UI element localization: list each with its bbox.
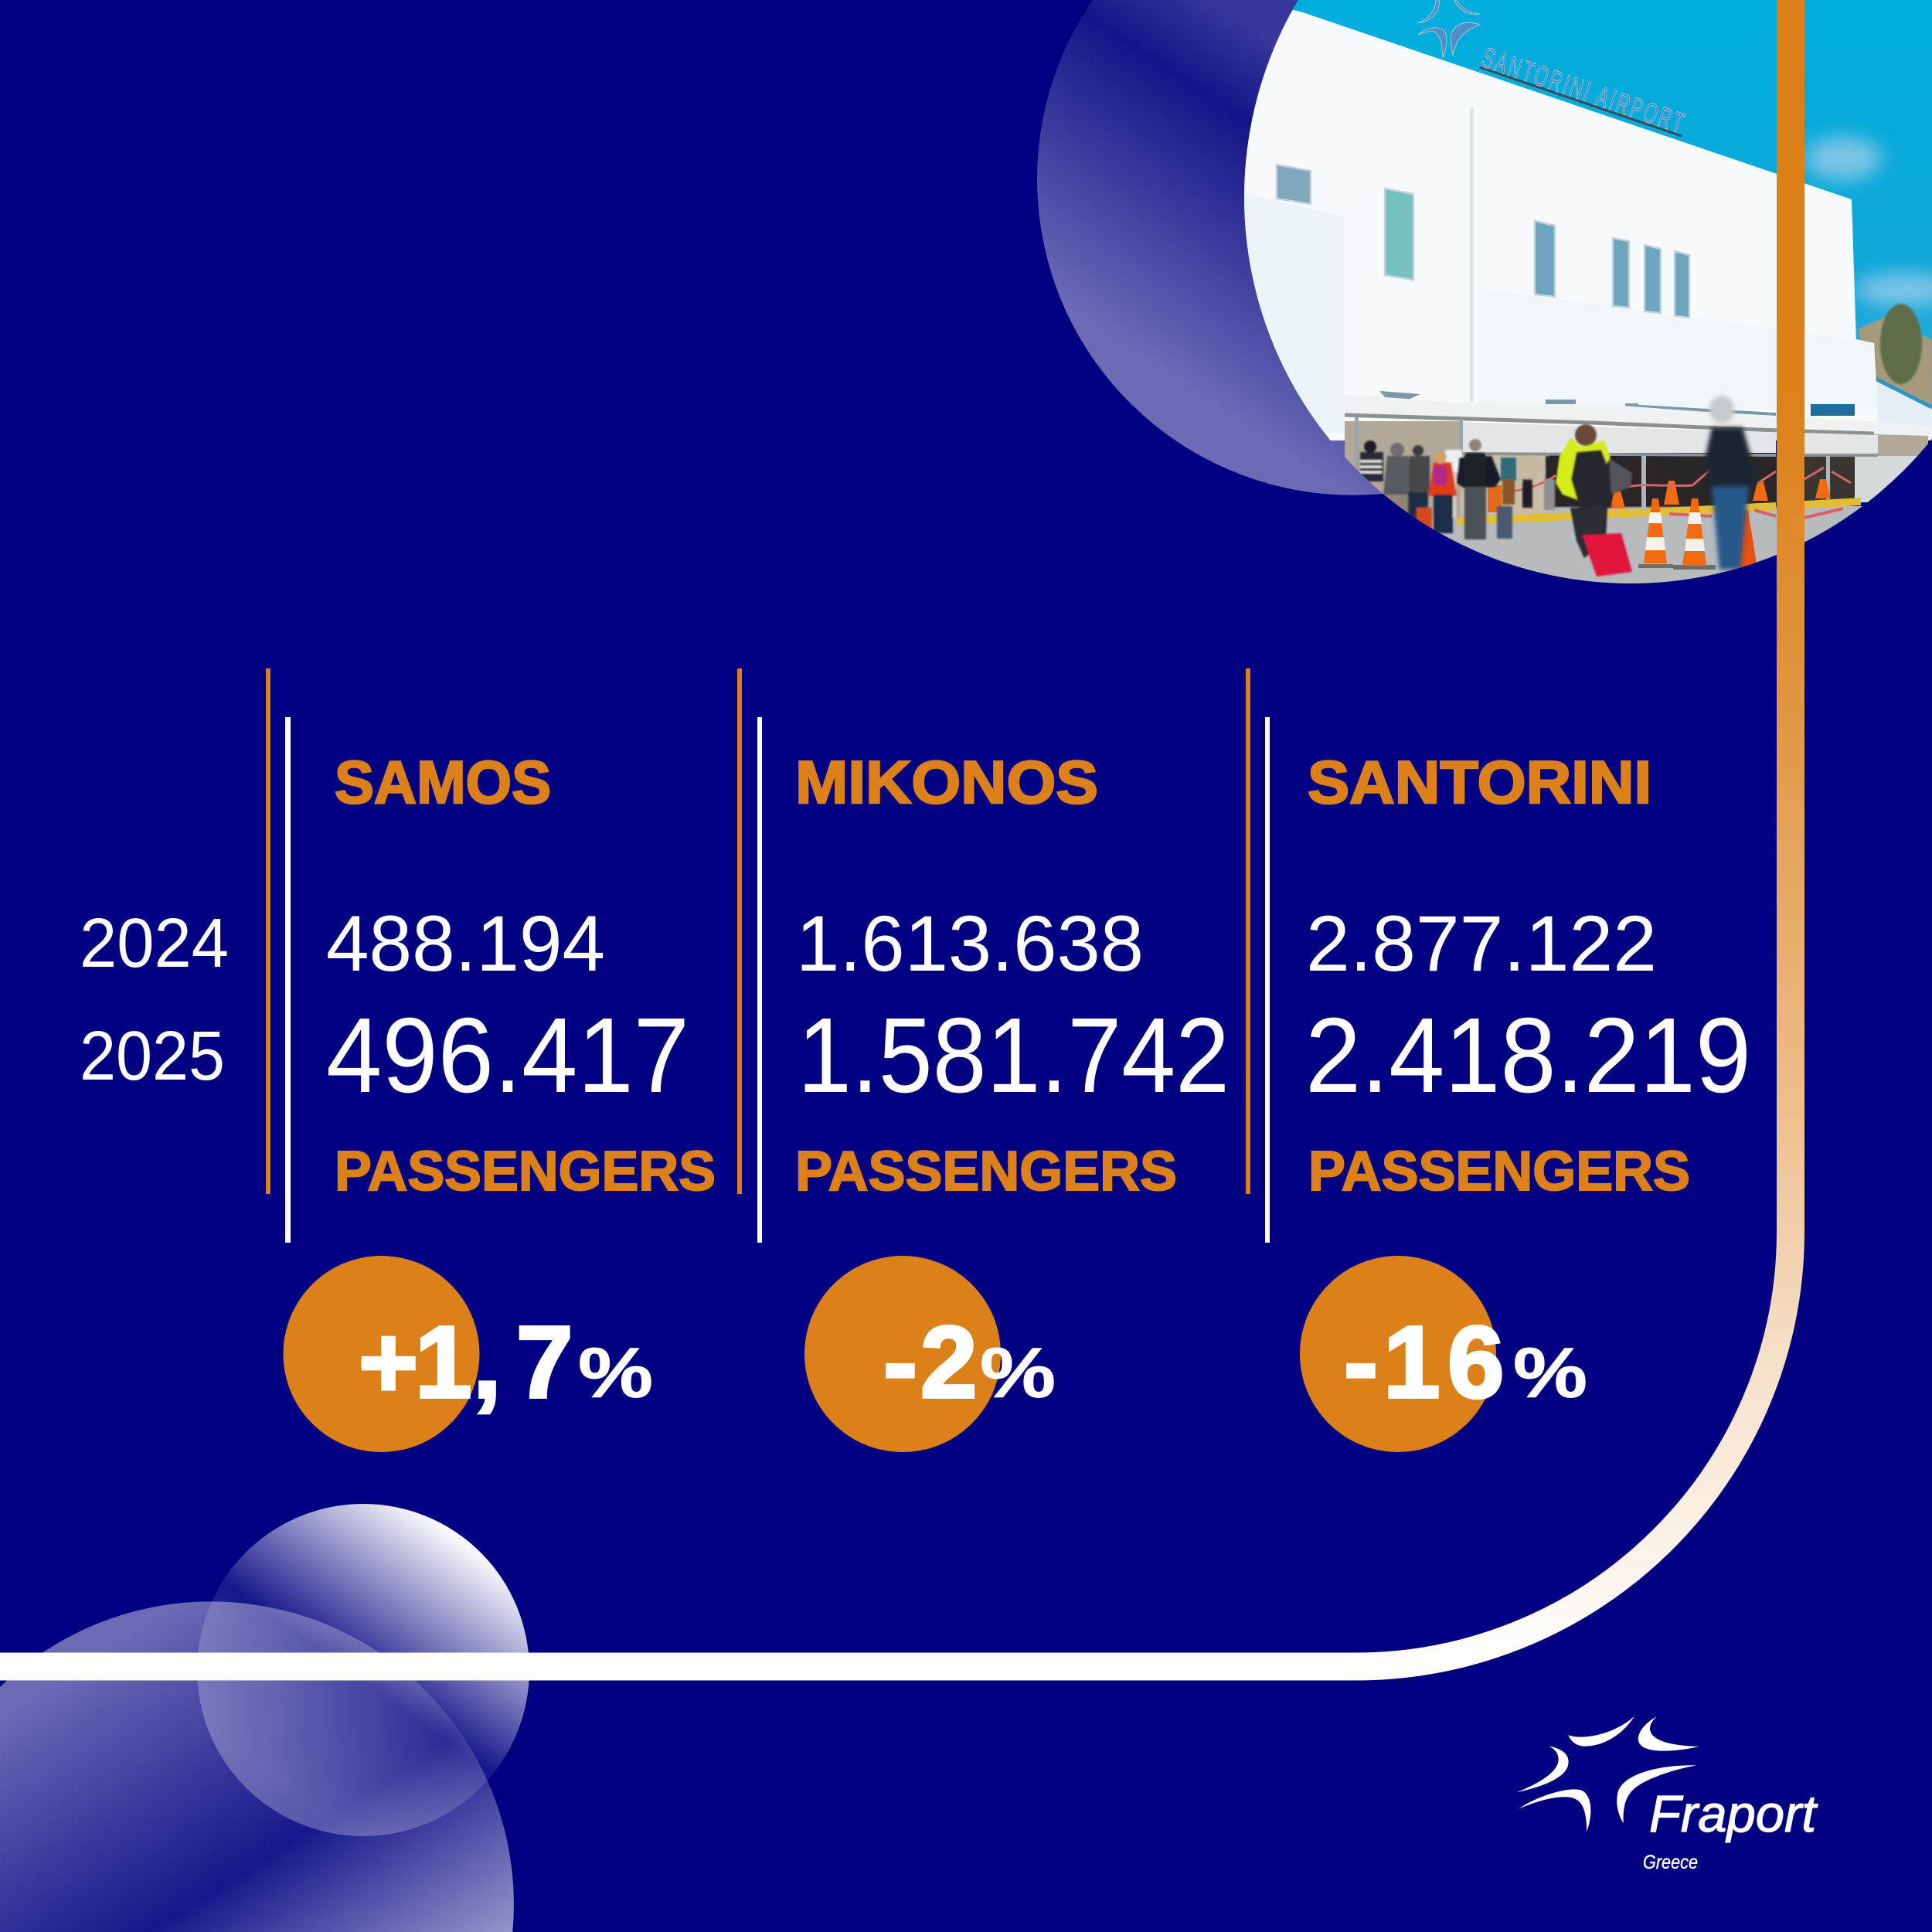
annex roof edge <box>1876 379 1932 407</box>
ground <box>1399 506 1862 583</box>
tree and hillside <box>1859 304 1932 417</box>
person in hi-vis jacket <box>1556 424 1632 558</box>
direction sign <box>1811 404 1855 416</box>
icon: star swooshes <box>1517 1716 1699 1832</box>
curved line: orange vertical to white horizontal <box>0 0 1791 1666</box>
heading: MIKONOS <box>795 748 1098 816</box>
table dividers <box>266 668 1270 1243</box>
2025 value: 496.417 <box>326 996 689 1115</box>
year labels: 2024 <box>80 905 229 982</box>
kerb <box>1457 498 1861 526</box>
terminal building <box>1244 0 1879 440</box>
year labels <box>80 905 229 1095</box>
2024 value: 1.613.638 <box>796 900 1144 988</box>
change badge: Santorini: % <box>1513 1334 1587 1413</box>
subline: Greece <box>1643 1852 1698 1873</box>
column: Santorini <box>1305 748 1751 1202</box>
clouds <box>1804 137 1932 307</box>
2024 value: 488.194 <box>326 900 605 988</box>
unit: PASSENGERS <box>335 1141 716 1202</box>
background cones and ropes <box>1488 468 1851 512</box>
decorative circle: behind photo <box>1037 0 1669 495</box>
unit: PASSENGERS <box>1308 1141 1690 1202</box>
change badge: Samos: +1,7 <box>359 1305 573 1419</box>
column: Samos <box>326 748 716 1202</box>
canopy <box>1345 394 1932 510</box>
decorative circle: large bottom left <box>0 1601 514 1932</box>
small vents <box>1379 391 1776 416</box>
rooftop logo <box>1418 0 1480 58</box>
wall beneath canopy <box>1345 421 1928 518</box>
rooftop sign: SANTORINI AIRPORT <box>1478 42 1688 140</box>
change badge: Santorini <box>1300 1256 1587 1452</box>
year labels: 2025 <box>80 1018 225 1095</box>
change badge: Mikonos <box>804 1256 1056 1452</box>
rope on ground <box>1669 509 1843 518</box>
rooftop sign rail <box>1480 67 1682 136</box>
logo: Fraport Greece <box>1517 1716 1818 1873</box>
column: Mikonos <box>795 748 1230 1202</box>
side annex <box>1876 381 1932 440</box>
2024 value: 2.877.122 <box>1306 900 1657 988</box>
person in blue jeans <box>1706 396 1758 570</box>
heading: SAMOS <box>335 748 551 816</box>
red suitcase <box>1582 533 1632 577</box>
sky <box>1244 0 1932 433</box>
heading: SANTORINI <box>1308 748 1651 816</box>
decorative circle: small bottom left <box>197 1504 529 1836</box>
foreground cones <box>1638 498 1757 570</box>
change badge: Santorini: -16 <box>1344 1305 1504 1419</box>
2025 value: 2.418.219 <box>1305 996 1751 1115</box>
windows <box>1277 165 1689 318</box>
unit: PASSENGERS <box>795 1141 1177 1202</box>
change badge: Mikonos: % <box>980 1334 1056 1413</box>
wordmark: Fraport <box>1649 1785 1818 1843</box>
change badge: Mikonos: -2 <box>883 1305 977 1419</box>
photo: Santorini airport terminal in circular crop <box>1244 0 1932 595</box>
change badge: Samos <box>283 1256 653 1452</box>
2025 value: 1.581.742 <box>798 996 1230 1115</box>
passengers group left <box>1360 439 1555 539</box>
change badge: Samos: % <box>578 1334 653 1413</box>
